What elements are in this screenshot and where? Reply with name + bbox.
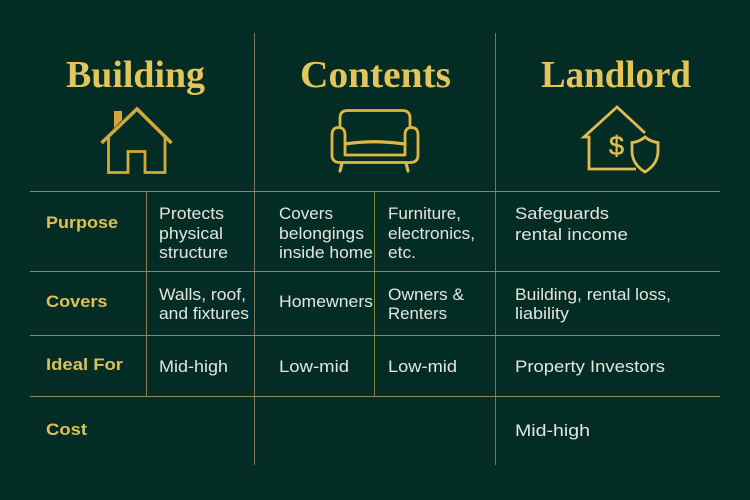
- cell: contents owners and renters: Owners &: [388, 285, 465, 304]
- cell: contents examples: electronics,: [388, 224, 475, 243]
- row: Ideal For: [46, 355, 665, 376]
- cell: building covers: and fixtures: [159, 304, 249, 323]
- cell: contents owners and renters: Renters: [388, 304, 447, 323]
- cell: landlord ideal for: Property Investors: [515, 357, 665, 376]
- label: Ideal For: Ideal For: [46, 355, 123, 374]
- cell: contents homeowners: Homewners: [279, 292, 373, 311]
- icon: house with dollar and shield: [584, 107, 658, 172]
- label: Cost: Cost: [46, 420, 87, 439]
- cell: contents second ideal for: Low-mid: [388, 357, 457, 376]
- cell: building purpose: [159, 204, 228, 262]
- cell: building covers: [159, 285, 249, 323]
- cell: building covers: Walls, roof,: [159, 285, 246, 304]
- cell: landlord covers: liability: [515, 304, 570, 323]
- icon: house: [102, 109, 172, 172]
- cell: contents purpose: inside home: [279, 243, 373, 262]
- cell: building ideal for: Mid-high: [159, 357, 228, 376]
- cell: landlord purpose: rental income: [515, 225, 628, 244]
- heading: Building: Building: [66, 54, 205, 96]
- cell: contents purpose: [279, 204, 373, 262]
- cell: landlord covers: Building, rental loss,: [515, 285, 671, 304]
- heading: Landlord: Landlord: [541, 54, 691, 96]
- cell: building purpose: Protects: [159, 204, 224, 223]
- label: Purpose: Purpose: [46, 213, 118, 232]
- cell: building purpose: structure: [159, 243, 228, 262]
- cell: building purpose: physical: [159, 224, 223, 243]
- cell: contents examples: Furniture,: [388, 204, 461, 223]
- icon: sofa: [332, 110, 418, 171]
- heading: Contents: Contents: [300, 54, 451, 96]
- cell: contents ideal for: Low-mid: [279, 357, 349, 376]
- row: Covers: [46, 285, 671, 323]
- icon: house with dollar and shield: $: [609, 131, 624, 161]
- cell: landlord purpose: Safeguards: [515, 204, 609, 223]
- cell: contents purpose: Covers: [279, 204, 333, 223]
- cell: contents owners and renters: [388, 285, 465, 323]
- cell: contents examples: etc.: [388, 243, 416, 262]
- row: Cost: [46, 420, 590, 440]
- cell: contents purpose: belongings: [279, 224, 364, 243]
- cell: landlord cost: Mid-high: [515, 421, 590, 440]
- cell: contents examples: [388, 204, 475, 262]
- cell: landlord covers: [515, 285, 671, 323]
- row: Purpose: [46, 204, 628, 262]
- cell: landlord purpose: [515, 204, 628, 244]
- label: Covers: Covers: [46, 292, 108, 311]
